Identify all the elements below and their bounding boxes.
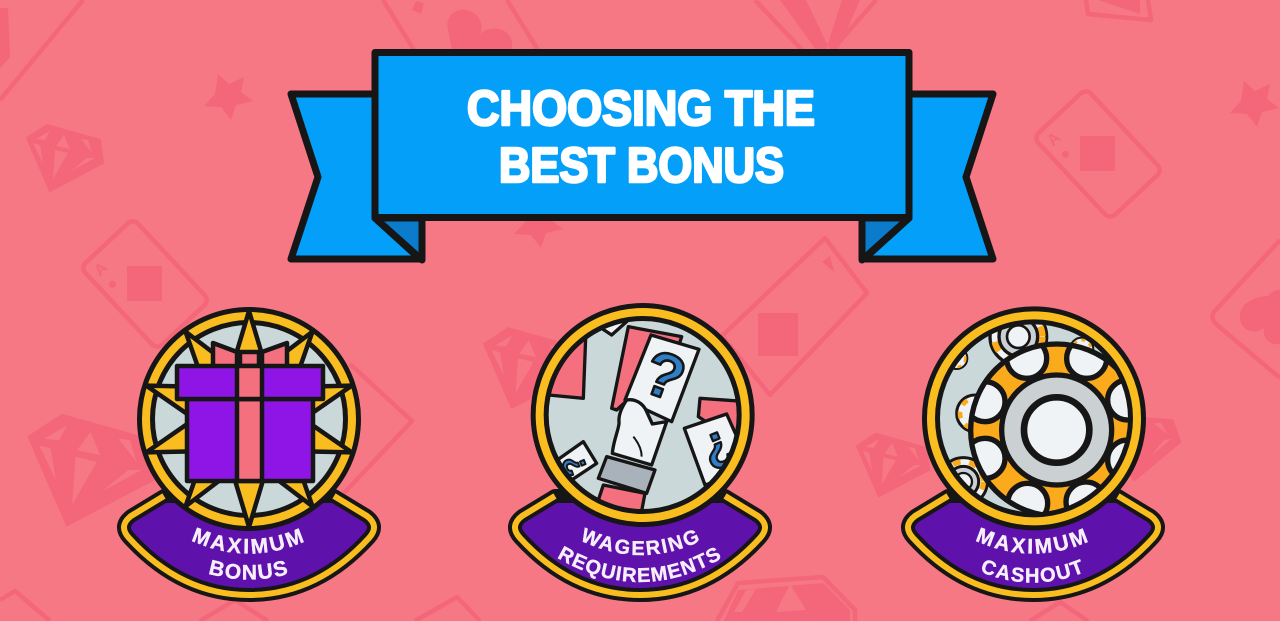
- icon: gift box: [177, 343, 323, 481]
- label: bonus: BONUS: [209, 560, 288, 580]
- left ribbon fold: [375, 218, 422, 260]
- main ribbon panel: [375, 52, 909, 218]
- icon: casino chips: [931, 308, 1148, 523]
- ribbon: wagering requirements: [515, 496, 765, 595]
- badge: maximum cashout: [900, 306, 1166, 602]
- label: requirements: REQUIREMENTS: [558, 546, 720, 582]
- title text: [467, 82, 815, 193]
- icon: hand holding question cards: ¿: [692, 411, 741, 474]
- big chip: [973, 346, 1128, 512]
- title text: CHOOSING THE: [467, 82, 815, 136]
- right ribbon tail: [864, 94, 993, 259]
- left ribbon tail: [291, 94, 420, 259]
- ribbon: maximum bonus: [124, 496, 374, 595]
- icon: hand holding question cards: ?: [634, 337, 694, 416]
- badge: maximum bonus: [116, 307, 382, 602]
- small chips: [950, 324, 1094, 498]
- title text: BEST BONUS: [499, 139, 784, 193]
- ribbon: maximum cashout: [908, 496, 1158, 595]
- label: maximum: MAXIMUM: [976, 527, 1088, 554]
- label: wagering: WAGERING: [582, 527, 699, 556]
- medallion with star: [142, 311, 356, 527]
- icon: hand holding question cards: ¿: [559, 448, 600, 479]
- badge: wagering requirements: [508, 303, 772, 602]
- right ribbon fold: [862, 218, 909, 260]
- label: cashout: CASHOUT: [982, 559, 1081, 583]
- icon: hand holding question cards: [532, 312, 752, 520]
- title banner: [291, 52, 993, 260]
- label: maximum: MAXIMUM: [192, 527, 304, 554]
